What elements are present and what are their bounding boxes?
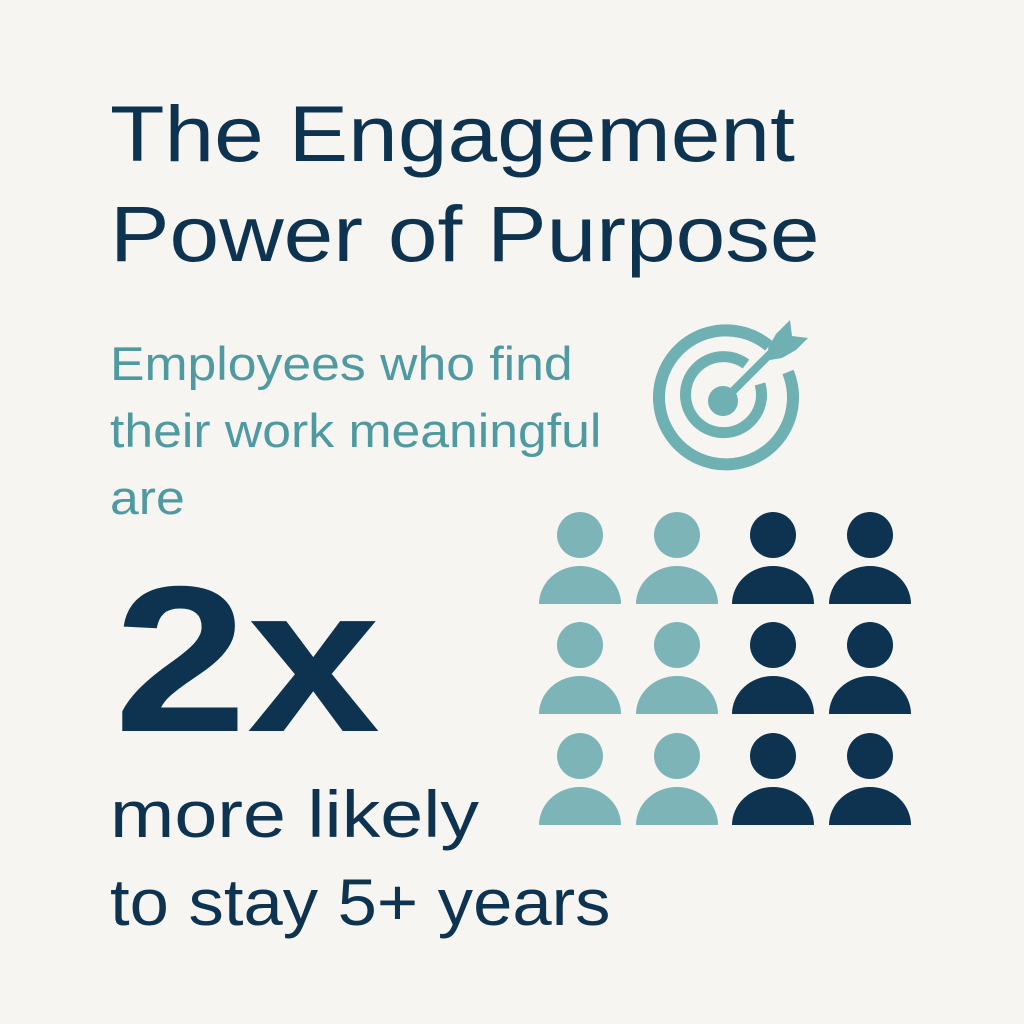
subtitle text: are — [110, 471, 185, 524]
title — [110, 89, 820, 278]
subtitle text: Employees who find — [110, 337, 573, 390]
stat description: more likely — [110, 777, 479, 851]
subtitle text — [110, 337, 601, 524]
big stat 2x: 2x — [114, 544, 380, 776]
title: The Engagement — [110, 89, 795, 178]
title: Power of Purpose — [110, 189, 820, 278]
stat description line 2: to stay 5+ years — [110, 865, 610, 939]
subtitle text: their work meaningful — [110, 404, 601, 457]
